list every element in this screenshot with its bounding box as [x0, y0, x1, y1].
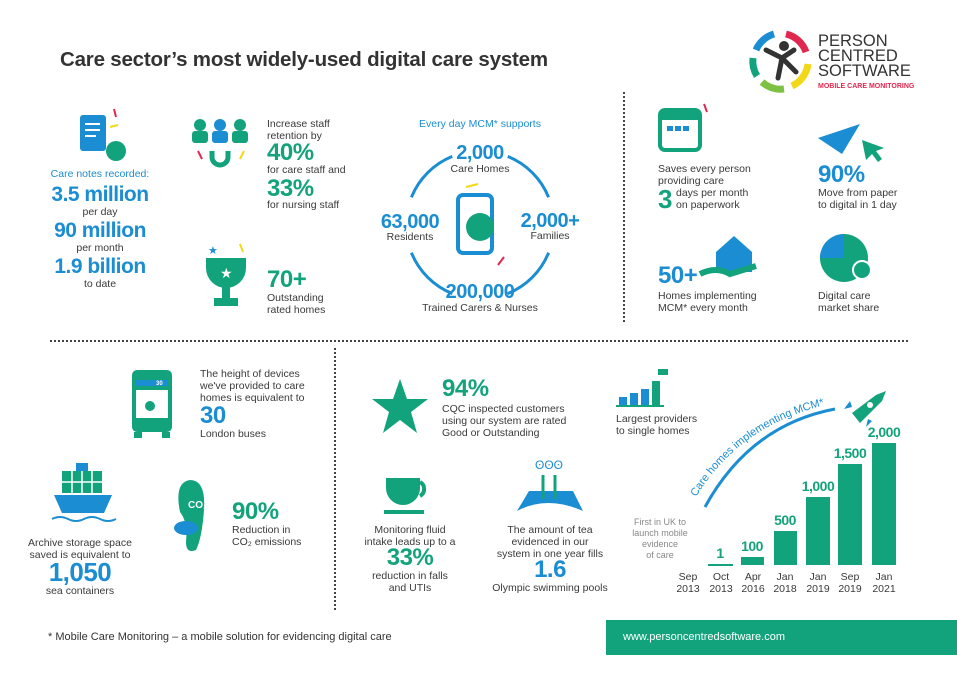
panel: fluid intake: Monitoring fluid [374, 524, 446, 536]
panel: 90% paper to digital: to digital in 1 day [818, 199, 897, 211]
panel: staff retention: 40% [267, 139, 314, 166]
panel: saves 3 days: 3 [658, 184, 672, 214]
panel: largest providers [616, 369, 697, 437]
panel: London buses: we've provided to care [200, 380, 305, 392]
panel: London buses: homes is equivalent to [200, 392, 304, 404]
panel: every day supports: 200,000 [446, 281, 514, 303]
panel: CO2: CO₂ emissions [232, 536, 301, 548]
arrow: curve with rocket [691, 391, 886, 508]
panel: care notes [51, 108, 149, 290]
logo: PERSON [818, 32, 888, 50]
bar chart: care homes implementing MCM: Jan [876, 571, 892, 583]
panel: staff retention: for nursing staff [267, 199, 339, 211]
icon: cup [384, 478, 426, 514]
panel: CO2 [174, 480, 301, 551]
panel: London buses: The height of devices [200, 368, 300, 380]
icon: footprint [174, 480, 207, 551]
icon: calendar [658, 104, 708, 152]
bar chart: care homes implementing MCM: evidence [642, 539, 678, 549]
bar chart: care homes implementing MCM: 100 [741, 538, 763, 554]
panel: sea containers: sea containers [46, 585, 114, 597]
panel: CQC 94%: 94% [442, 375, 489, 402]
panel: outstanding: Outstanding [267, 292, 324, 304]
footer url bar: www.personcentredsoftware.com [623, 631, 785, 643]
panel: CQC 94%: using our system are rated [442, 415, 566, 427]
panel: largest providers: Largest providers [616, 413, 697, 425]
logo: MOBILE CARE MONITORING [818, 83, 914, 90]
panel: staff retention: for care staff and [267, 164, 346, 176]
bar chart: care homes implementing MCM: 2013 [676, 583, 700, 595]
icon: pool: ʘʘʘ [535, 458, 563, 472]
icon: trophy [206, 244, 246, 306]
bar chart: care homes implementing MCM: Oct [713, 571, 729, 583]
panel: olympic pools: system in one year fills [497, 548, 603, 560]
bar chart: care homes implementing MCM: 2013 [709, 583, 733, 595]
footnote: * Mobile Care Monitoring – a mobile solution for evidencing digital care [48, 631, 392, 643]
icon: footprint: CO₂ [188, 500, 207, 511]
panel: every day supports: 2,000+ [521, 210, 579, 232]
panel: olympic pools: The amount of tea [507, 524, 593, 536]
panel: 90% paper to digital: Move from paper [818, 187, 897, 199]
logo [749, 30, 914, 93]
icon: house in hand [698, 236, 757, 278]
panel: olympic pools [492, 458, 608, 594]
bar chart: care homes implementing MCM: 2016 [741, 583, 765, 595]
icon: note with hand [80, 108, 126, 161]
panel: care notes: 3.5 million [51, 183, 149, 206]
bar chart: care homes implementing MCM: launch mobile [632, 528, 688, 538]
bar chart: care homes implementing MCM: Sep [679, 571, 697, 583]
panel: every day supports [381, 118, 579, 314]
bar chart: care homes implementing MCM: 2019 [806, 583, 830, 595]
bar chart: care homes implementing MCM: 1,000 [802, 478, 834, 494]
icon: ship [52, 463, 116, 522]
panel: CO2: 90% [232, 498, 279, 525]
bar chart: care homes implementing MCM: Apr [745, 571, 761, 583]
icon: trophy: ★ [220, 265, 233, 281]
panel: outstanding [206, 244, 325, 316]
bar chart: care homes implementing MCM [632, 391, 900, 595]
panel: fluid intake: and UTIs [389, 582, 431, 594]
logo: SOFTWARE [818, 62, 911, 80]
bar chart: care homes implementing MCM: Sep [841, 571, 859, 583]
panel: CQC 94%: CQC inspected customers [442, 403, 565, 415]
panel: London buses [132, 368, 305, 440]
icon: pie chart [820, 234, 870, 282]
panel: olympic pools: Olympic swimming pools [492, 582, 608, 594]
panel: saves 3 days [658, 104, 751, 214]
panel: fluid intake: reduction in falls [372, 570, 448, 582]
panel: London buses: London buses [200, 428, 266, 440]
icon: paper plane [818, 124, 884, 162]
panel: staff retention: Increase staff [267, 118, 330, 130]
dividers [623, 92, 625, 322]
panel: staff retention: retention by [267, 130, 322, 142]
panel: every day supports: Care Homes [451, 163, 509, 175]
arrow: curve with rocket: Care homes implementing MCM* [691, 398, 823, 496]
panel: 50+ homes: 50+ [658, 262, 697, 289]
panel: every day supports: 63,000 [381, 211, 439, 233]
bar chart: care homes implementing MCM: 1 [716, 545, 724, 561]
panel: care notes: per month [76, 242, 124, 254]
panel: every day supports: Families [530, 230, 570, 242]
bar chart: care homes implementing MCM: 1,500 [834, 445, 866, 461]
panel: olympic pools: evidenced in our [511, 536, 589, 548]
panel: care notes: to date [84, 278, 116, 290]
panel: largest providers: to single homes [616, 425, 690, 437]
panel: fluid intake [364, 478, 456, 594]
panel: fluid intake: intake leads up to a [364, 536, 456, 548]
panel: 50+ homes [658, 236, 757, 314]
panel: olympic pools: 1.6 [534, 556, 566, 583]
panel: care notes: 90 million [54, 219, 146, 242]
panel: CQC 94%: Good or Outstanding [442, 427, 539, 439]
bar chart: care homes implementing MCM: 2018 [773, 583, 797, 595]
panel: outstanding: 70+ [267, 266, 306, 293]
bar chart: care homes implementing MCM: 500 [774, 512, 796, 528]
panel: care notes: per day [82, 206, 118, 218]
icon: bars flag [616, 369, 668, 407]
title: Care sector’s most widely-used digital care system [60, 48, 548, 71]
panel: every day supports: Trained Carers & Nurses [422, 302, 538, 314]
panel: CQC 94% [372, 375, 566, 439]
panel: care notes: Care notes recorded: [51, 168, 149, 180]
panel: CO2: Reduction in [232, 524, 290, 536]
icon: pool [517, 458, 583, 511]
bar chart: care homes implementing MCM: 2021 [872, 583, 896, 595]
icon: bus [132, 370, 172, 438]
panel: sea containers: Archive storage space [28, 537, 132, 549]
panel: saves 3 days: providing care [658, 175, 724, 187]
icon: trophy: ★ [208, 245, 218, 257]
panel: saves 3 days: on paperwork [676, 199, 740, 211]
panel: care notes: 1.9 billion [54, 255, 146, 278]
bar chart: care homes implementing MCM: First in UK to [634, 517, 686, 527]
icon: people magnet [192, 119, 248, 168]
panel: sea containers: saved is equivalent to [30, 549, 130, 561]
bar chart: care homes implementing MCM: of care [646, 550, 674, 560]
panel: sea containers [28, 463, 132, 597]
panel: market share: market share [818, 302, 879, 314]
icon: star [372, 379, 428, 433]
panel: outstanding: rated homes [267, 304, 325, 316]
panel: every day supports: Every day MCM* supports [419, 118, 541, 130]
logo: CENTRED [818, 47, 898, 65]
panel: every day supports: Residents [387, 231, 433, 243]
panel: London buses: 30 [200, 402, 226, 429]
circle ring [410, 155, 550, 295]
panel: 50+ homes: MCM* every month [658, 302, 748, 314]
bar chart: care homes implementing MCM: 2019 [838, 583, 862, 595]
bar chart: care homes implementing MCM: Jan [810, 571, 826, 583]
panel: saves 3 days: days per month [676, 187, 748, 199]
panel: 50+ homes: Homes implementing [658, 290, 757, 302]
panel: staff retention [192, 118, 346, 211]
bar chart: care homes implementing MCM: Jan [777, 571, 793, 583]
panel: 90% paper to digital: 90% [818, 161, 865, 188]
panel: staff retention: 33% [267, 175, 314, 202]
panel: every day supports: 2,000 [456, 142, 504, 164]
panel: market share: Digital care [818, 290, 871, 302]
panel: sea containers: 1,050 [49, 557, 111, 587]
icon: bus: 30 [156, 381, 163, 387]
panel: 90% paper to digital [818, 124, 898, 211]
footer url bar [606, 620, 957, 655]
panel: market share [818, 234, 879, 314]
bar chart: care homes implementing MCM: 2,000 [868, 424, 900, 440]
panel: fluid intake: 33% [387, 544, 433, 571]
panel: saves 3 days: Saves every person [658, 163, 751, 175]
